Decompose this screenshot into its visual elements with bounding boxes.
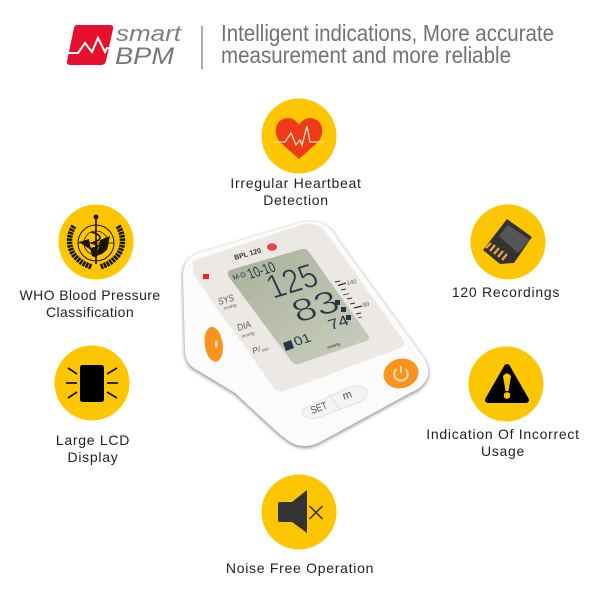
set and memory buttons: m: [341, 388, 354, 403]
icon: WHO emblem: [58, 204, 134, 280]
label: incorrect usage: Usage: [481, 443, 525, 459]
label: WHO classification: Classification: [46, 304, 134, 320]
icon: muted speaker: [262, 474, 336, 550]
label: irregular heartbeat detection: Detection: [263, 192, 329, 208]
logo: smart BPM: [67, 21, 182, 70]
set and memory buttons: [302, 386, 367, 418]
logo: smart BPM: smart: [116, 21, 182, 46]
power button: [380, 355, 422, 392]
label: 120 recordings: 120 Recordings: [452, 284, 560, 300]
lcd readings: 83: [285, 283, 345, 329]
lcd readings: mmHg: [326, 341, 342, 350]
panel labels: 90: [362, 302, 371, 309]
scale marks: [335, 281, 362, 318]
lcd readings: 10-10: [245, 259, 278, 283]
logo: smart BPM: BPM: [115, 43, 174, 70]
set and memory buttons: SET: [309, 400, 329, 417]
label: large LCD display: [56, 432, 130, 465]
label: incorrect usage: [426, 426, 580, 459]
label: WHO classification: [19, 287, 161, 320]
side orange button: [202, 326, 225, 363]
label: irregular heartbeat detection: [230, 175, 362, 208]
monitor body: [183, 222, 428, 446]
lcd readings: [232, 256, 352, 351]
panel labels: SYS: [217, 293, 235, 308]
panel labels: P/: [251, 344, 262, 356]
header tagline: [221, 20, 554, 68]
label: noise free operation: Noise Free Operation: [226, 560, 374, 576]
header tagline: measurement and more reliable: [221, 42, 511, 68]
panel labels: 140: [346, 279, 358, 287]
label: large LCD display: Display: [68, 449, 118, 465]
label: large LCD display: Large LCD: [56, 432, 130, 448]
panel labels: DIA: [236, 319, 253, 334]
header divider: [201, 26, 203, 69]
monitor shadow: [183, 223, 428, 448]
lcd readings: 74: [326, 312, 352, 334]
icon: heart with pulse: [262, 98, 336, 174]
label: irregular heartbeat detection: Irregular Heartbeat: [230, 175, 362, 191]
lcd readings: M-D: [232, 272, 247, 282]
icon: large LCD display: [54, 346, 130, 420]
panel labels: mmHg: [241, 330, 255, 339]
panel labels: [203, 243, 371, 356]
lcd screen: [228, 249, 369, 364]
panel labels: BPL 120: [234, 248, 262, 262]
lcd readings: 01: [291, 330, 314, 349]
panel labels: min: [261, 346, 270, 353]
label: WHO classification: WHO Blood Pressure: [19, 287, 161, 303]
label: incorrect usage: Indication Of Incorrect: [426, 426, 580, 442]
header tagline: Intelligent indications, More accurate: [221, 20, 554, 46]
icon: warning triangle: [468, 346, 544, 422]
lcd readings: 125: [260, 256, 324, 306]
panel labels: mmHg: [223, 302, 237, 311]
icon: SD memory card: [470, 204, 546, 280]
monitor top panel: [192, 224, 404, 392]
blood pressure monitor: [183, 222, 428, 448]
